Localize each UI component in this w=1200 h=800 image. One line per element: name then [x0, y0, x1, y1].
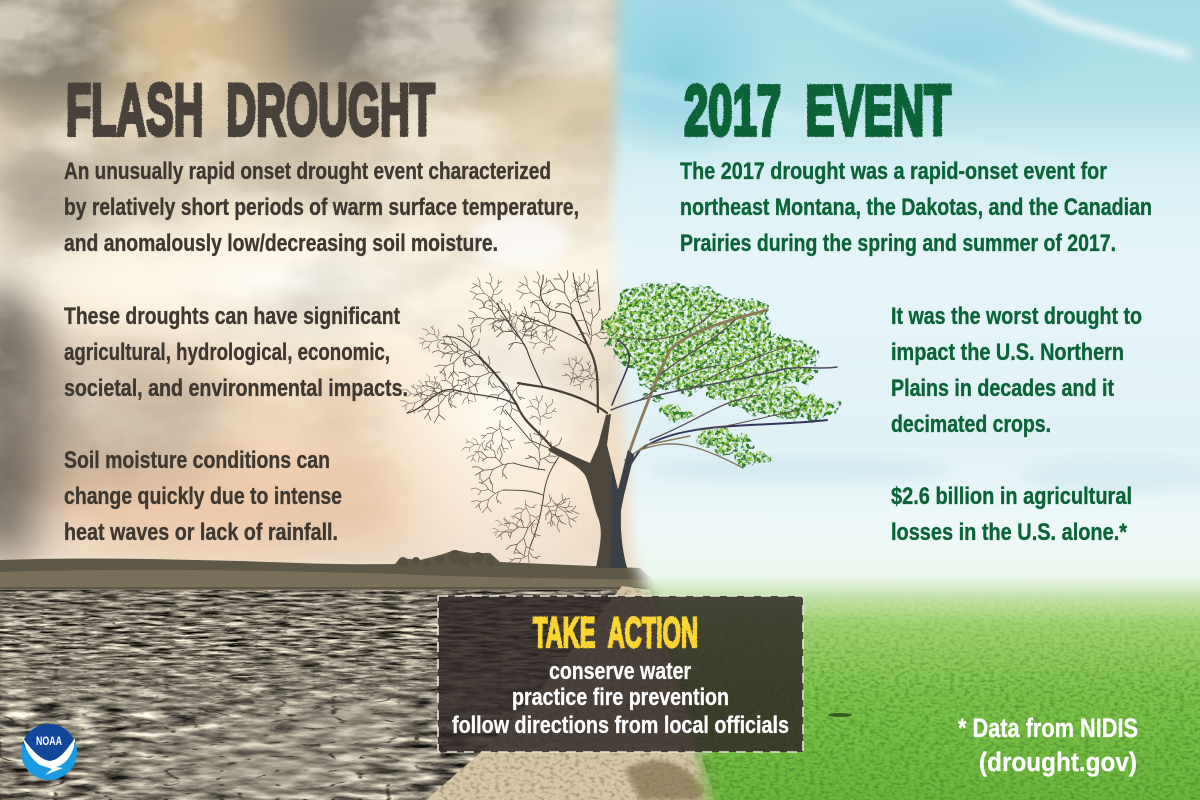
right half: branches: [611, 305, 837, 497]
logo: NOAA: NOAA: [36, 734, 62, 748]
text: impacts: These droughts can have significant: [64, 303, 400, 330]
footnote: data source: * Data from NIDIS: [958, 713, 1138, 743]
text: impacts: [64, 303, 408, 402]
panel: take action: [438, 596, 803, 752]
foliage: [603, 283, 843, 467]
text: definition: An unusually rapid onset drought event characterized: [64, 158, 551, 185]
text: soil moisture: Soil moisture conditions can: [64, 447, 330, 474]
text: agricultural losses: [891, 483, 1132, 546]
horizon shoreline: [0, 550, 664, 590]
background: drought sky: [0, 0, 660, 600]
dirt road: [420, 586, 720, 800]
text: worst drought: [891, 303, 1142, 438]
text: impacts: agricultural, hydrological, economic,: [64, 339, 390, 366]
text: agricultural losses: losses in the U.S. alone.*: [891, 519, 1128, 546]
trunk: [548, 414, 634, 568]
text: 2017 summary: [680, 158, 1152, 257]
text: soil moisture: heat waves or lack of rainfall.: [64, 519, 338, 546]
text: definition: [64, 158, 579, 257]
action list: [452, 658, 789, 739]
foliage highlights: [606, 286, 838, 464]
footnote: data source: [958, 713, 1138, 777]
text: worst drought: decimated crops.: [891, 411, 1051, 438]
text: 2017 summary: The 2017 drought was a rapid-onset event for: [680, 158, 1107, 185]
background: healthy sky and grass: [580, 0, 1200, 800]
tree: [398, 268, 843, 585]
footnote: data source: (drought.gov): [979, 747, 1137, 777]
text: impacts: societal, and environmental impacts.: [64, 375, 408, 402]
title: 2017 event: 2017 EVENT: [684, 72, 951, 151]
background: cracked earth: [0, 585, 720, 800]
action list: practice fire prevention: [512, 684, 729, 711]
action list: conserve water: [549, 658, 691, 685]
heading: take action: TAKE ACTION: [533, 609, 698, 657]
trunk: living side: [610, 450, 634, 568]
text: soil moisture: [64, 447, 342, 546]
text: definition: and anomalously low/decreasing soil moisture.: [64, 230, 498, 257]
title: flash drought: FLASH DROUGHT: [66, 70, 435, 151]
text: worst drought: Plains in decades and it: [891, 375, 1114, 402]
text: soil moisture: change quickly due to intense: [64, 483, 342, 510]
bare half: limbs: [407, 270, 607, 547]
text: definition: by relatively short periods of warm surface temperature,: [64, 194, 579, 221]
logo: NOAA: [21, 724, 77, 780]
text: worst drought: It was the worst drought to: [891, 303, 1142, 330]
text: agricultural losses: $2.6 billion in agricultural: [891, 483, 1132, 510]
bare half: twigs: [398, 268, 620, 585]
action list: follow directions from local officials: [452, 712, 789, 739]
text: worst drought: impact the U.S. Northern: [891, 339, 1124, 366]
